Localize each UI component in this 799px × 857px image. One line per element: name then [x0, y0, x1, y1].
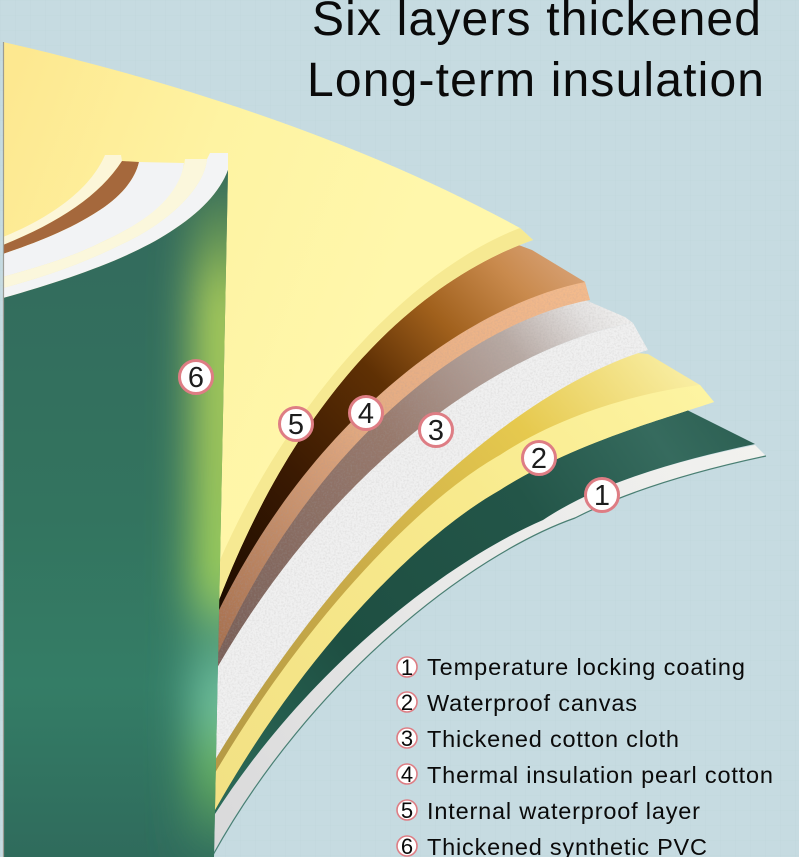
- legend item 2: 2: [401, 690, 413, 715]
- badge 3: [420, 414, 452, 447]
- badge 5: [280, 408, 312, 441]
- title: Long-term insulation: [307, 54, 764, 107]
- numbered badges on the layers: [180, 360, 618, 512]
- layer 1 green: waterproof canvas underside: [213, 395, 755, 817]
- layer 4: thermal insulation pearl cotton: [218, 240, 590, 653]
- legend item 1: Temperature locking coating: [427, 654, 745, 680]
- layer edges at top of folded panel: [3, 153, 228, 298]
- legend item 1: 1: [401, 655, 413, 680]
- legend: [397, 654, 773, 857]
- legend item 5: 5: [401, 798, 413, 823]
- badge 2: 2: [531, 443, 547, 475]
- badge 2: [522, 442, 556, 475]
- badge 6: 6: [188, 362, 204, 394]
- badge 1: 1: [594, 480, 610, 512]
- badge 1: [586, 478, 618, 512]
- layer 3: thickened cotton cloth: [215, 290, 648, 760]
- badge 6: [180, 360, 212, 394]
- badge 4: [350, 396, 382, 430]
- title: [307, 0, 764, 107]
- legend item 5: Internal waterproof layer: [427, 798, 700, 824]
- legend item 4: Thermal insulation pearl cotton: [427, 762, 773, 788]
- layer 1: temperature locking coating: [213, 445, 766, 855]
- legend item 3: Thickened cotton cloth: [427, 726, 679, 752]
- legend item 2: Waterproof canvas: [427, 690, 637, 716]
- badge 3: 3: [428, 415, 444, 447]
- layer 5: internal waterproof layer: [3, 42, 533, 600]
- badge 5: 5: [288, 409, 304, 441]
- badge 4: 4: [358, 398, 374, 430]
- left edge line: [2, 42, 4, 857]
- layer 2: waterproof canvas: [215, 350, 714, 810]
- legend item 4: 4: [401, 762, 413, 787]
- layer 6: thickened synthetic PVC panel: [3, 170, 250, 857]
- legend item 3: 3: [401, 726, 413, 751]
